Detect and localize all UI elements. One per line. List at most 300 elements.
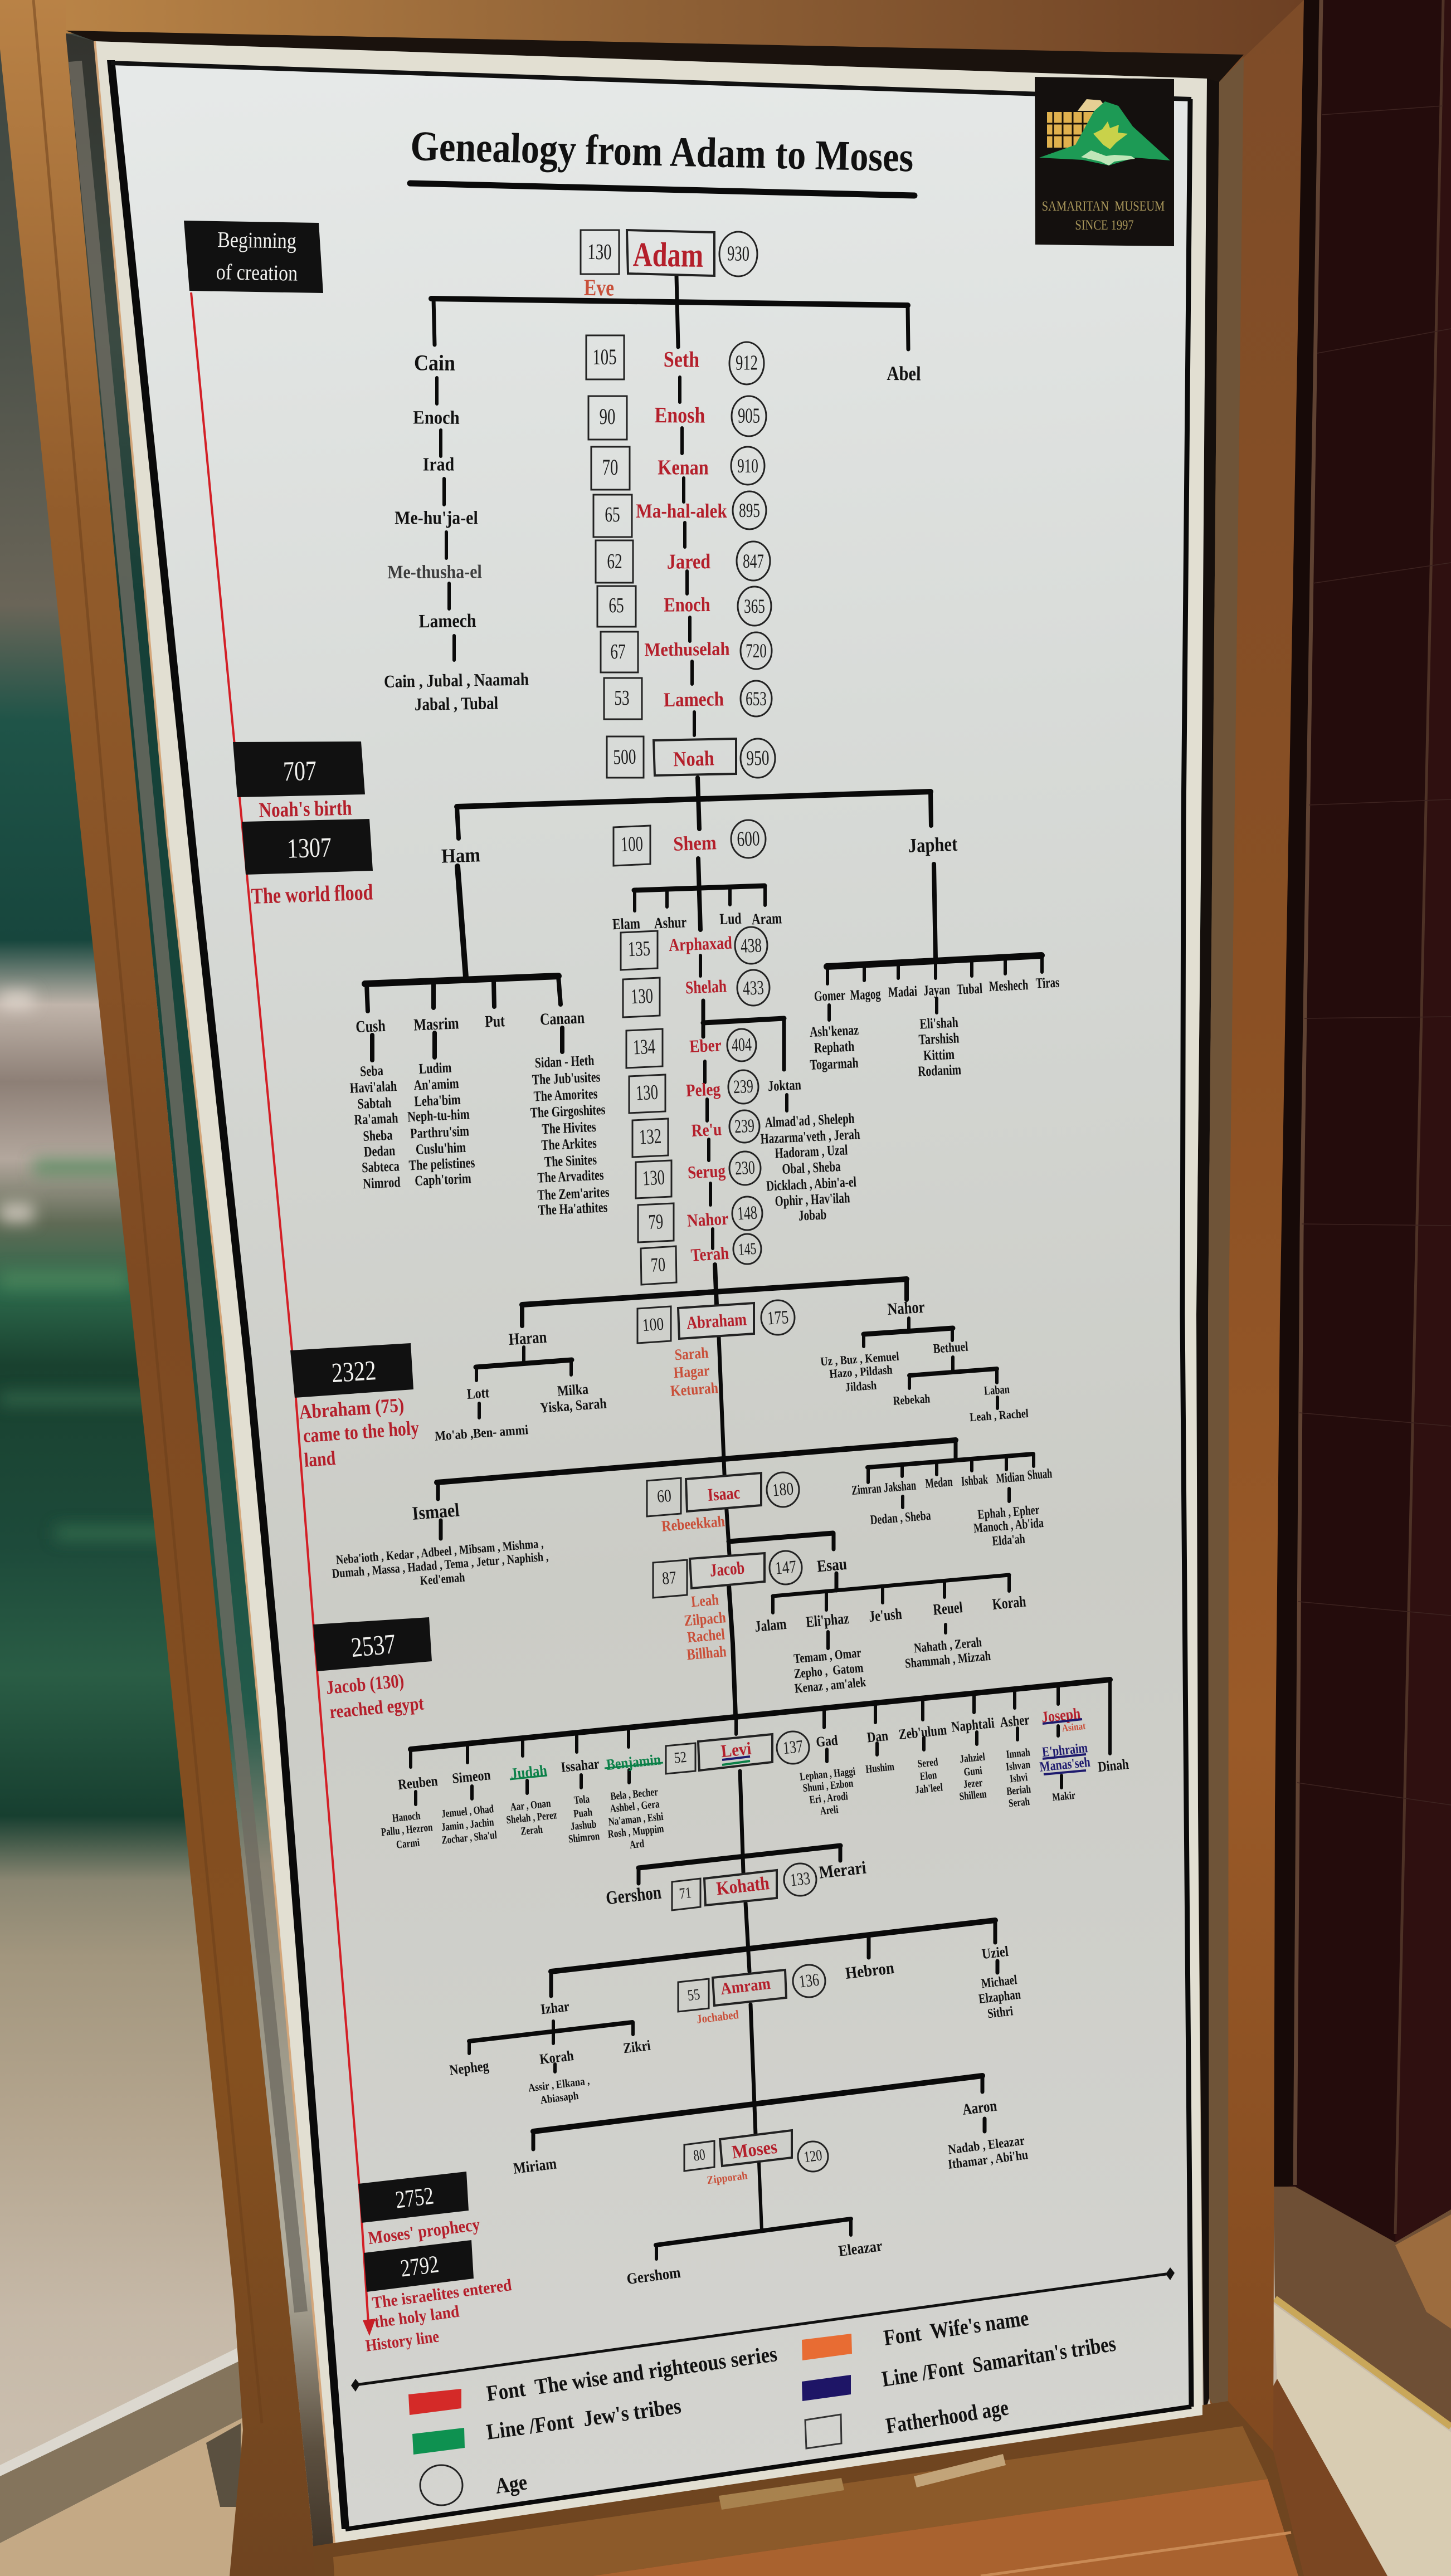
Keturah's children: Dedan , Sheba bbox=[870, 1507, 932, 1528]
Nahor's family: Laban bbox=[983, 1383, 1010, 1398]
Japhet and descendants: Ash'kenaz bbox=[809, 1021, 859, 1040]
tribe: Judah bbox=[505, 1762, 558, 1837]
Esau and descendants: Esau bbox=[816, 1555, 848, 1576]
Nahor's family: Jildash bbox=[845, 1379, 877, 1394]
node: Shem: 100 bbox=[620, 832, 644, 857]
node: Moses: 80 bbox=[693, 2146, 706, 2164]
tribe: Benjamin: Ashbel , Gera bbox=[610, 1797, 660, 1815]
Joktan and descendants: Jobab bbox=[798, 1207, 827, 1223]
node: Kenan: 70 bbox=[602, 455, 618, 480]
Esau and descendants: Nahath , Zerah bbox=[913, 1635, 982, 1656]
tribe: Naphtali: Jezer bbox=[963, 1776, 983, 1790]
tribe: Gad bbox=[799, 1733, 856, 1817]
tribe: Naphtali: Guni bbox=[963, 1764, 983, 1778]
Masrim's sons: The pelistines bbox=[408, 1155, 475, 1174]
Ismael and descendants: Ismael bbox=[411, 1499, 460, 1524]
Japhet and descendants: Togarmah bbox=[810, 1054, 859, 1073]
legend: orange: Font Wife's name bbox=[882, 2305, 1030, 2350]
legend: fatherhood box bbox=[805, 2394, 1010, 2448]
Masrim's sons: Cuslu'him bbox=[415, 1139, 466, 1158]
Keturah's children: Medan bbox=[925, 1475, 953, 1491]
node: Enosh: 90 bbox=[600, 404, 615, 429]
Joktan and descendants: Hazarma'veth , Jerah bbox=[760, 1126, 860, 1147]
Canaan's sons: The Sinites bbox=[544, 1151, 597, 1170]
tribe: Simeon: Simeon bbox=[451, 1768, 491, 1787]
timeline marker: beginning of creation: of creation bbox=[216, 260, 298, 286]
Joktan and descendants: Dicklach , Abin'a-el bbox=[766, 1174, 857, 1194]
Cush's sons: Sabteca bbox=[362, 1158, 400, 1176]
connectors: Jacob's children bbox=[411, 1680, 1110, 1804]
timeline marker: 707 Noah's birth: 707 bbox=[283, 755, 317, 787]
legend divider with diamond ends bbox=[351, 2267, 1175, 2392]
node: Shelah: 433 bbox=[742, 976, 765, 999]
timeline marker: 1307 the world flood: The world flood bbox=[251, 880, 373, 909]
Japhet and descendants: Tubal bbox=[956, 980, 983, 997]
tribe: Issahar: Issahar bbox=[560, 1756, 600, 1775]
node: Methuselah bbox=[601, 632, 772, 672]
Ham and descendants: Canaan bbox=[539, 1008, 585, 1028]
tribe: Joseph, Ephraim and Manasseh: Manas'seh bbox=[1039, 1754, 1091, 1774]
Hebron: Hebron bbox=[844, 1959, 895, 1983]
tribe: Naphtali: Jahziel bbox=[959, 1750, 986, 1765]
tribe: Benjamin: Bela , Becher bbox=[610, 1785, 659, 1803]
Cush's sons bbox=[349, 1063, 401, 1192]
Nahor's family: Leah , Rachel bbox=[969, 1407, 1029, 1424]
Cain descendants column: Jabal , Tubal bbox=[415, 694, 498, 715]
node: Terah bbox=[641, 1234, 761, 1285]
Japhet and descendants: Japhet bbox=[908, 833, 958, 857]
tribe: Dan: Hushim bbox=[865, 1760, 895, 1775]
timeline marker: 707 Noah's birth: Noah's birth bbox=[259, 796, 352, 822]
Nahor's family: Nahor bbox=[887, 1297, 925, 1319]
timeline marker: 2752 Moses' prophecy: Moses' prophecy bbox=[367, 2214, 481, 2248]
timeline marker: 2792 the israelites entered the holy land: 2792 bbox=[399, 2250, 440, 2282]
tribe: Judah: Shelah , Perez bbox=[505, 1808, 558, 1826]
Nahor's family bbox=[820, 1297, 1029, 1424]
node: Serug bbox=[636, 1152, 761, 1198]
tribe: Zeb'ulum: Jah'leel bbox=[914, 1780, 943, 1796]
Haran's family: Lott bbox=[466, 1385, 490, 1402]
tree section: twelve tribes and Levi bbox=[381, 1680, 1129, 1851]
Esau and descendants: Reuel bbox=[932, 1599, 963, 1618]
node: Moses: Zipporah bbox=[706, 2169, 748, 2187]
tribe: Benjamin: Na'aman , Eshi bbox=[608, 1810, 664, 1828]
Esau and descendants: Shammah , Mizzah bbox=[904, 1648, 991, 1671]
tribe: Gad: Gad bbox=[815, 1733, 839, 1750]
Keturah's children: Midian bbox=[996, 1470, 1025, 1486]
node: Kohath: Kohath bbox=[715, 1872, 771, 1899]
node: Peleg: 239 bbox=[733, 1076, 754, 1097]
Masrim's sons: Leha'bim bbox=[414, 1092, 461, 1110]
node: Re'u: 132 bbox=[639, 1125, 662, 1149]
timeline marker: 2322 Abraham came to the holy land bbox=[290, 1343, 420, 1472]
Izhar and sons: Izhar bbox=[540, 1999, 571, 2018]
Haran's family: Haran bbox=[508, 1328, 547, 1349]
Keturah's children bbox=[851, 1466, 1053, 1549]
history line with arrow bbox=[191, 292, 376, 2336]
node: Ma-hal-alek: 65 bbox=[605, 503, 620, 526]
tribe: Dan: Dan bbox=[866, 1728, 889, 1746]
node: Enosh: Enosh bbox=[655, 403, 705, 428]
Masrim's sons: Caph'torim bbox=[415, 1170, 472, 1189]
Shem's other sons bbox=[612, 910, 782, 933]
tribe: Asher: Serah bbox=[1008, 1795, 1030, 1809]
Canaan's sons: The Hivites bbox=[542, 1118, 596, 1137]
legend bbox=[408, 2305, 1117, 2505]
node: Terah: 145 bbox=[738, 1239, 757, 1259]
node: Jacob: 147 bbox=[774, 1557, 797, 1578]
tribe: Naphtali: Shillem bbox=[959, 1787, 987, 1803]
node: Enosh bbox=[588, 396, 766, 440]
node: Abraham: 100 bbox=[642, 1314, 664, 1335]
node: Re'u: 239 bbox=[734, 1116, 755, 1137]
Keturah's children: Manoch , Ab'ida bbox=[973, 1515, 1044, 1536]
Cain descendants column: Cain , Jubal , Naamah bbox=[384, 670, 529, 692]
node: Nahor: 148 bbox=[737, 1202, 758, 1224]
node: Abraham bbox=[637, 1300, 795, 1400]
node: Jared: 847 bbox=[743, 550, 764, 572]
timeline marker: 2752 Moses' prophecy: 2752 bbox=[394, 2182, 435, 2214]
Joktan and descendants: Hadoram , Uzal bbox=[775, 1142, 848, 1161]
Gershom and Eleazar bbox=[626, 2237, 883, 2288]
node: Levi: 52 bbox=[673, 1748, 688, 1767]
node: Noah: 500 bbox=[613, 745, 636, 769]
Shem's other sons: Aram bbox=[751, 910, 782, 928]
legend: age circle: Age bbox=[494, 2469, 529, 2499]
node: Enoch: 365 bbox=[744, 595, 765, 617]
timeline marker: 2322 Abraham came to the holy land: came to the holy bbox=[303, 1417, 420, 1447]
node: Adam: 130 bbox=[587, 239, 612, 265]
node: Eber bbox=[626, 1029, 756, 1068]
node: Eber: 404 bbox=[731, 1035, 752, 1056]
node: Amram: Amram bbox=[719, 1974, 772, 1999]
node: Seth bbox=[586, 335, 764, 384]
tribe: Judah: Judah bbox=[510, 1762, 548, 1783]
Canaan's sons: Sidan - Heth bbox=[534, 1052, 595, 1071]
Canaan's sons: The Jub'usites bbox=[532, 1069, 601, 1087]
node: Abraham: Sarah bbox=[674, 1344, 709, 1364]
node: Noah bbox=[607, 736, 775, 778]
tribe: Issahar: Puah bbox=[573, 1806, 593, 1820]
node: Jacob bbox=[653, 1551, 802, 1663]
Joktan and descendants: Ophir , Hav'ilah bbox=[775, 1190, 850, 1209]
Japhet and descendants: Gomer bbox=[814, 987, 846, 1004]
node: Methuselah: Methuselah bbox=[644, 638, 730, 660]
node: Re'u bbox=[632, 1110, 759, 1157]
node: Isaac: 60 bbox=[656, 1486, 672, 1507]
timeline marker: 2537 Jacob reached Egypt: Jacob (130) bbox=[325, 1670, 405, 1698]
Izhar and sons: Abiasaph bbox=[539, 2089, 580, 2106]
tribe: Naphtali bbox=[951, 1715, 995, 1803]
Ismael and descendants bbox=[332, 1499, 549, 1588]
node: Moses: Moses bbox=[731, 2136, 778, 2163]
connectors: Adam children bbox=[431, 276, 908, 735]
Miriam: Miriam bbox=[512, 2155, 558, 2177]
node: Arphaxad: 135 bbox=[627, 937, 651, 962]
node: Ma-hal-alek: 895 bbox=[739, 499, 760, 521]
poster board with black border bbox=[95, 41, 1207, 2543]
timeline marker: 2322 Abraham came to the holy land: land bbox=[303, 1447, 337, 1472]
Esau and descendants: Eli'phaz bbox=[805, 1610, 850, 1631]
node: Terah: Terah bbox=[690, 1244, 730, 1265]
node: Arphaxad bbox=[621, 927, 767, 970]
tribe: Joseph, Ephraim and Manasseh: Asinat bbox=[1062, 1720, 1087, 1734]
Japhet and descendants: Rephath bbox=[814, 1038, 855, 1056]
node: Enosh: 905 bbox=[738, 404, 760, 428]
node: Kenan bbox=[591, 447, 765, 490]
node: Isaac: Isaac bbox=[707, 1483, 741, 1505]
tribe: Benjamin bbox=[605, 1750, 664, 1851]
legend: red font bbox=[408, 2341, 778, 2415]
Cush's sons: Ra'amah bbox=[354, 1110, 398, 1128]
timeline marker: 2792 the israelites entered the holy land bbox=[364, 2240, 513, 2355]
tribe: Issahar: Shimron bbox=[568, 1829, 600, 1845]
Aaron and sons: Aaron bbox=[961, 2096, 998, 2119]
Cush's sons: Nimrod bbox=[363, 1174, 401, 1192]
Ham and descendants: Put bbox=[484, 1012, 505, 1031]
tree section: Adam to Noah bbox=[384, 230, 921, 778]
tribe: Gad: Areli bbox=[820, 1803, 839, 1817]
node: Lamech: Lamech bbox=[664, 688, 724, 711]
node: Ma-hal-alek: Ma-hal-alek bbox=[636, 500, 727, 523]
Canaan's sons: The Amorites bbox=[533, 1085, 598, 1104]
node: Lamech: 53 bbox=[614, 686, 630, 710]
Keturah's children: Ephah , Epher bbox=[977, 1502, 1040, 1522]
node: Seth: 105 bbox=[592, 345, 617, 369]
node: Seth: Seth bbox=[664, 348, 700, 372]
Japhet and descendants: Kittim bbox=[923, 1046, 955, 1063]
tribe: Zeb'ulum bbox=[898, 1722, 948, 1796]
Cain descendants column: Cain bbox=[414, 351, 455, 375]
Joktan and descendants: Almad'ad , Sheleph bbox=[765, 1110, 855, 1130]
legend: red font: Font The wise and righteous series bbox=[485, 2341, 778, 2406]
Nahor's family: Hazo , Pildash bbox=[829, 1363, 893, 1381]
Joktan and descendants: Joktan bbox=[768, 1077, 802, 1095]
Cain descendants column: Enoch bbox=[413, 407, 460, 428]
Joktan and descendants: Obal , Sheba bbox=[782, 1158, 841, 1177]
Haran's family: Mo'ab ,Ben- ammi bbox=[434, 1422, 529, 1443]
node: Jacob: Leah bbox=[690, 1591, 719, 1611]
tribe: Issahar bbox=[560, 1756, 600, 1845]
Aaron and sons bbox=[947, 2096, 1029, 2172]
node: Shem: 600 bbox=[737, 827, 760, 851]
Uziel and sons: Uziel bbox=[981, 1944, 1010, 1963]
Esau and descendants: Temam , Omar bbox=[793, 1645, 862, 1666]
Cain descendants column bbox=[384, 351, 529, 715]
node: Enoch: 65 bbox=[608, 594, 624, 617]
Canaan's sons: The Girgoshites bbox=[530, 1101, 606, 1121]
Japhet and descendants bbox=[809, 833, 1060, 1079]
node: Kohath bbox=[672, 1863, 816, 1910]
node: Jacob: Zilpach bbox=[683, 1608, 727, 1629]
Canaan's sons bbox=[530, 1052, 610, 1218]
tribe: Gad: Lephan , Haggi bbox=[799, 1765, 856, 1783]
tribe: Reuben: Reuben bbox=[397, 1773, 439, 1793]
Ismael and descendants: Neba'ioth , Kedar , Adbeel , Mibsam , Mishma , bbox=[335, 1536, 544, 1567]
Masrim's sons bbox=[407, 1060, 475, 1189]
node: Shem: Shem bbox=[673, 832, 717, 855]
node: Serug: 230 bbox=[734, 1158, 756, 1179]
node: Eber: 134 bbox=[632, 1035, 656, 1060]
timeline marker: beginning of creation: Beginning bbox=[217, 228, 296, 253]
node: Jacob: Billhah bbox=[686, 1642, 727, 1663]
Esau and descendants: Korah bbox=[991, 1593, 1027, 1613]
legend: age circle bbox=[420, 2465, 529, 2505]
Esau and descendants: Je'ush bbox=[868, 1606, 903, 1626]
Esau and descendants: Jalam bbox=[754, 1616, 787, 1636]
Ismael and descendants: Ked'emah bbox=[420, 1570, 466, 1588]
node: Jared: 62 bbox=[607, 550, 622, 573]
Izhar and sons bbox=[449, 1999, 651, 2106]
tribe: Reuben: Carmi bbox=[396, 1836, 420, 1851]
node: Kenan: 910 bbox=[737, 455, 758, 477]
Cush's sons: Sabtah bbox=[357, 1095, 392, 1113]
tree section: Noah to Terah bbox=[349, 778, 1060, 1285]
tribe: Simeon: Jemuel , Ohad bbox=[441, 1802, 494, 1820]
Canaan's sons: The Ha'athites bbox=[538, 1199, 608, 1218]
node: Noah: Noah bbox=[673, 747, 715, 771]
timeline marker: 2322 Abraham came to the holy land: Abraham (75) bbox=[298, 1394, 405, 1423]
tribe: Asher: Ishvan bbox=[1005, 1758, 1031, 1773]
node: Ma-hal-alek bbox=[593, 491, 766, 537]
museum logo bbox=[1035, 77, 1174, 246]
node: Seth: 912 bbox=[736, 352, 758, 375]
legend: green bbox=[412, 2393, 683, 2455]
tribe: Simeon: Jamin , Jachin bbox=[441, 1816, 494, 1833]
node: Abraham: Keturah bbox=[670, 1379, 719, 1400]
node: Kohath: 133 bbox=[789, 1869, 811, 1890]
Japhet and descendants: Tarshish bbox=[918, 1030, 960, 1047]
Esau and descendants: Kenaz , am'alek bbox=[794, 1675, 866, 1696]
node: Jacob: Rachel bbox=[686, 1625, 726, 1646]
tribe: Simeon: Zochar , Sha'ul bbox=[441, 1828, 498, 1846]
node: Shelah: Shelah bbox=[685, 977, 727, 998]
Canaan's sons: The Arkites bbox=[541, 1134, 597, 1153]
node: Kohath: 71 bbox=[678, 1885, 693, 1902]
node: Methuselah: 67 bbox=[610, 640, 626, 663]
node: Peleg: Peleg bbox=[685, 1080, 721, 1101]
Ismael and descendants: Dumah , Massa , Hadad , Tema , Jetur , Naphish , bbox=[332, 1549, 549, 1581]
timeline marker: 1307 the world flood bbox=[242, 819, 373, 909]
node: Jared: Jared bbox=[667, 550, 711, 573]
Japhet and descendants: Rodanim bbox=[917, 1061, 962, 1079]
node: Isaac: Rebeekkah bbox=[661, 1513, 726, 1535]
Keturah's children: Jakshan bbox=[883, 1479, 917, 1495]
Cain descendants column: Me-thusha-el bbox=[387, 560, 482, 583]
Nahor's family: Uz , Buz , Kemuel bbox=[820, 1350, 900, 1369]
node: Peleg bbox=[629, 1070, 758, 1113]
node: Noah: 950 bbox=[746, 746, 770, 770]
node: Abraham: 175 bbox=[767, 1306, 789, 1329]
Esau and descendants: Zepho , Gatom bbox=[793, 1660, 864, 1681]
node: Adam: 930 bbox=[727, 242, 749, 266]
timeline marker: 2792 the israelites entered the holy land: The israelites entered bbox=[371, 2276, 513, 2312]
node: Peleg: 130 bbox=[635, 1081, 659, 1105]
Cain descendants column: Lamech bbox=[418, 609, 476, 632]
Uziel and sons bbox=[978, 1944, 1021, 2021]
tribe: Zeb'ulum: Elon bbox=[919, 1768, 937, 1783]
node: Abraham: Hagar bbox=[673, 1362, 710, 1382]
tribe: Asher bbox=[999, 1712, 1031, 1809]
node: Jacob: Jacob bbox=[709, 1558, 746, 1580]
tribe: Asher: Asher bbox=[999, 1712, 1030, 1731]
tree section: Levi to Moses bbox=[449, 1771, 1029, 2288]
timeline marker: 2322 Abraham came to the holy land: 2322 bbox=[330, 1355, 377, 1388]
Gershom and Eleazar: Gershom bbox=[626, 2263, 681, 2288]
node: Amram: 136 bbox=[798, 1970, 820, 1992]
Gershon and Merari: Merari bbox=[818, 1858, 867, 1882]
Esau and descendants bbox=[754, 1555, 1027, 1696]
legend: green: Line /Font Jew's tribes bbox=[485, 2393, 683, 2445]
timeline marker: beginning of creation bbox=[184, 221, 323, 293]
node: Enoch: Enoch bbox=[664, 594, 710, 616]
Gershon and Merari bbox=[605, 1858, 867, 1909]
Keturah's children: Zimran bbox=[851, 1481, 882, 1498]
timeline marker: 2537 Jacob reached Egypt bbox=[313, 1617, 432, 1723]
timeline marker: 2537 Jacob reached Egypt: reached egypt bbox=[329, 1692, 425, 1723]
Cush's sons: Dedan bbox=[363, 1143, 396, 1160]
connectors: Terah, Abraham, Isaac and Esau branches bbox=[437, 1265, 1034, 1716]
node: Amram: Jochabed bbox=[696, 2008, 740, 2026]
Japhet and descendants: Tiras bbox=[1035, 974, 1060, 991]
tribe: Issahar: Jashub bbox=[570, 1817, 597, 1833]
tribe: Simeon bbox=[441, 1768, 498, 1846]
tribe: Joseph, Ephraim and Manasseh: Joseph bbox=[1041, 1705, 1082, 1726]
Ham and descendants: Ham bbox=[441, 844, 481, 867]
node: Jacob: 87 bbox=[661, 1568, 677, 1589]
tribe: Reuben: Hanoch bbox=[392, 1809, 421, 1824]
tribe: Judah: Aar , Onan bbox=[510, 1797, 551, 1813]
tribe: Asher: Imnah bbox=[1005, 1746, 1031, 1760]
node: Levi: Levi bbox=[720, 1738, 752, 1762]
Haran's family bbox=[434, 1328, 607, 1443]
legend: orange bbox=[802, 2305, 1030, 2360]
Uziel and sons: Michael bbox=[980, 1972, 1018, 1991]
node: Isaac: 180 bbox=[771, 1479, 795, 1500]
node: Kenan: Kenan bbox=[658, 456, 709, 479]
node: Enoch bbox=[597, 586, 771, 627]
Cush's sons: Seba bbox=[360, 1063, 384, 1080]
Masrim's sons: An'amim bbox=[413, 1076, 460, 1094]
Nahor's family: Rebekah bbox=[893, 1392, 931, 1408]
node: Amram: 55 bbox=[686, 1985, 701, 2004]
node: Arphaxad: Arphaxad bbox=[668, 933, 733, 955]
Japhet and descendants: Jayan bbox=[923, 982, 951, 998]
timeline marker: 2752 Moses' prophecy bbox=[358, 2172, 481, 2248]
node: Abraham: Abraham bbox=[686, 1310, 747, 1333]
node: Methuselah: 720 bbox=[746, 640, 767, 662]
tribe: Naphtali: Naphtali bbox=[951, 1715, 995, 1735]
Joktan and descendants bbox=[760, 1077, 860, 1223]
Masrim's sons: Neph-tu-him bbox=[407, 1106, 470, 1125]
Cain descendants column: Me-hu'ja-el bbox=[395, 507, 478, 528]
timeline marker: 1307 the world flood: 1307 bbox=[286, 832, 332, 864]
tribe: Zeb'ulum: Sered bbox=[917, 1755, 939, 1770]
tribe: Benjamin: Ard bbox=[629, 1837, 645, 1851]
connectors: Levi, Kohath, Amram, Moses bbox=[469, 1771, 997, 2259]
node: Adam bbox=[581, 230, 757, 301]
Abel: Abel bbox=[887, 363, 921, 385]
node: Lamech bbox=[604, 678, 772, 719]
node: Eber: Eber bbox=[689, 1036, 722, 1056]
Shem's other sons: Lud bbox=[719, 910, 742, 928]
tribe: Gad: Shuni , Ezbon bbox=[802, 1777, 854, 1794]
node: Jared bbox=[596, 540, 770, 583]
Aaron and sons: Nadab , Eleazar bbox=[947, 2133, 1025, 2157]
Ham and descendants: Masrim bbox=[413, 1014, 460, 1034]
node: Re'u: Re'u bbox=[691, 1120, 722, 1141]
node: Serug: Serug bbox=[687, 1162, 726, 1183]
